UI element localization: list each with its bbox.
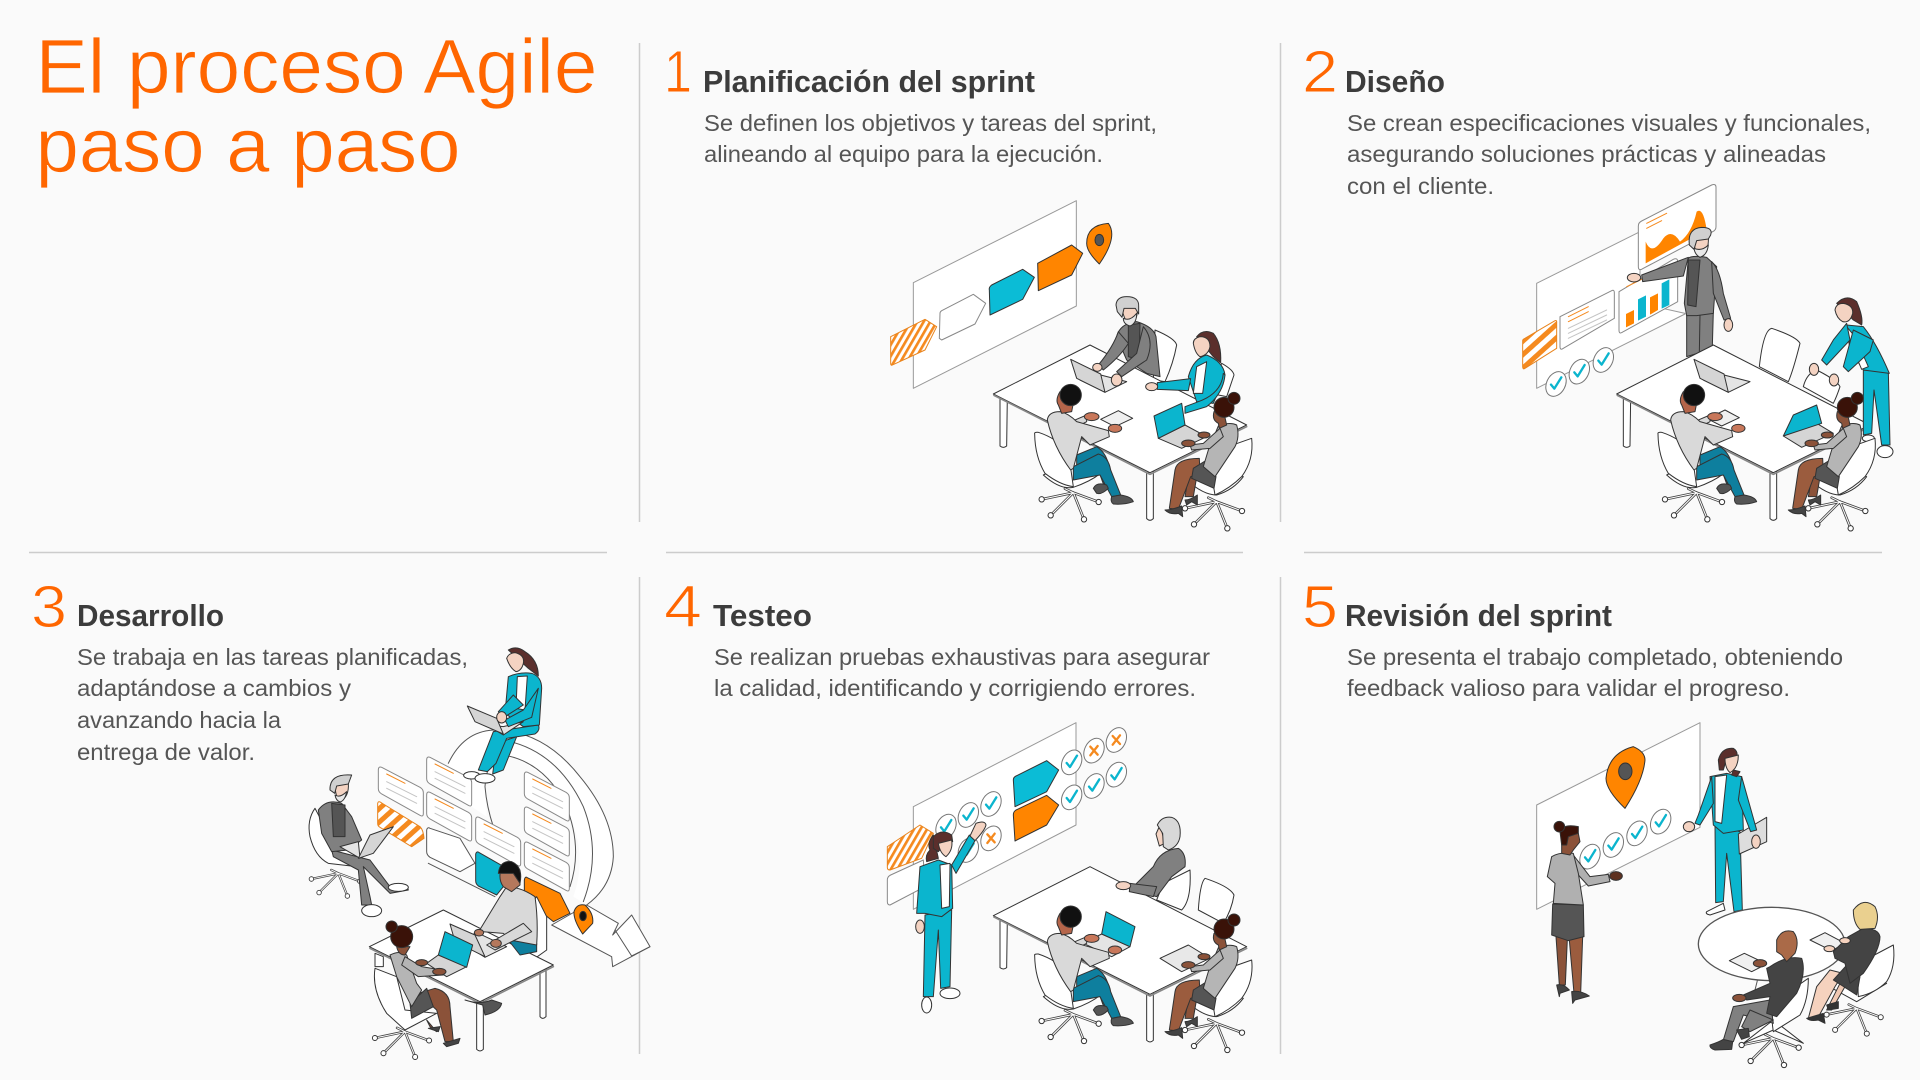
tablet <box>1160 945 1210 972</box>
title heading: paso a paso <box>36 103 460 189</box>
laptop teal, held <box>1783 405 1833 447</box>
meeting table <box>993 345 1247 520</box>
body text step 4 <box>714 644 1210 701</box>
illustration: testing session <box>887 723 1252 1053</box>
person: grey-haired man seen from behind <box>1130 817 1234 923</box>
empty chairs <box>1759 328 1800 382</box>
man hands and arm <box>1093 327 1150 386</box>
panel: step 2 diseño <box>1302 39 1893 531</box>
number 2: 2 <box>1302 39 1338 105</box>
heading step 4: Testeo <box>713 598 812 633</box>
panel: step 4 testeo <box>664 574 1252 1053</box>
person: standing man presenting <box>1627 227 1733 357</box>
heading step 2: Diseño <box>1345 64 1445 99</box>
board <box>1537 723 1700 909</box>
illustration: sprint loop and team <box>309 648 650 1060</box>
illustration: design session <box>1523 185 1893 531</box>
meeting table <box>993 867 1247 1042</box>
body text step 2: asegurando soluciones prácticas y alineadas <box>1347 141 1826 167</box>
illustration: sprint planning meeting <box>891 201 1252 531</box>
panel: step 5 revisión <box>1302 574 1894 1068</box>
body text step 5 <box>1347 644 1843 701</box>
person: woman on the loop with laptop <box>464 648 542 783</box>
person: woman seen from behind <box>1788 392 1875 531</box>
body text step 4: Se realizan pruebas exhaustivas para asegurar <box>714 644 1210 670</box>
body text step 1 <box>704 110 1157 167</box>
body text step 3: entrega de valor. <box>77 739 255 765</box>
heading step 3: Desarrollo <box>77 598 224 633</box>
area chart card <box>1638 185 1716 270</box>
body text step 2: Se crean especificaciones visuales y funcionales, <box>1347 110 1871 136</box>
tablet <box>1707 410 1739 426</box>
desk <box>369 910 553 1051</box>
icon: location pin <box>1087 223 1112 264</box>
body text step 3: adaptándose a cambios y <box>77 675 352 701</box>
panel: step 3 desarrollo <box>31 574 650 1060</box>
panel: title <box>36 24 598 189</box>
check marks on the board <box>932 724 1131 866</box>
laptop on desk, teal <box>427 932 473 977</box>
person: woman seen from behind <box>1165 914 1252 1053</box>
check marks <box>1576 806 1675 872</box>
number 4: 4 <box>664 574 702 640</box>
icon: location pin <box>574 905 593 934</box>
person: teal woman chair <box>1210 363 1234 397</box>
body text step 5: feedback valioso para validar el progreso. <box>1347 675 1790 701</box>
body text step 3: Se trabaja en las tareas planificadas, <box>77 644 468 670</box>
body text step 3: avanzando hacia la <box>77 707 281 733</box>
person: grey-haired man chair <box>1153 330 1177 382</box>
round table <box>1698 907 1845 997</box>
body text step 1: Se definen los objetivos y tareas del sprint, <box>704 110 1157 136</box>
board with roadmap tags <box>891 201 1083 388</box>
man's arm on table <box>1116 882 1157 897</box>
heading step 1: Planificación del sprint <box>703 64 1035 99</box>
person: grey-haired man <box>1098 297 1160 377</box>
person: man seen from behind <box>1035 906 1133 1044</box>
laptop on desk, grey <box>450 923 532 957</box>
laptop teal <box>1083 912 1135 957</box>
laptop grey <box>1694 359 1750 392</box>
number 3: 3 <box>31 574 67 640</box>
panel: step 1 planificación <box>664 39 1252 531</box>
person: bald man seated <box>1710 931 1808 1068</box>
board with cards <box>1523 232 1685 388</box>
meeting table <box>1617 345 1870 520</box>
body text step 1: alineando al equipo para la ejecución. <box>704 141 1103 167</box>
laptop teal <box>1154 403 1207 448</box>
sprint loop arrow <box>428 730 650 967</box>
person: blonde woman seated <box>1807 902 1894 1036</box>
person: seated man with laptop <box>309 775 408 917</box>
illustration: sprint review <box>1537 723 1894 1068</box>
person: man at desk chair <box>520 897 547 967</box>
board with tags and checks <box>887 723 1076 909</box>
person: woman in teal pointing <box>916 822 986 1013</box>
person: man in grey sweater at desk <box>477 861 537 955</box>
tags on the loop <box>378 802 570 922</box>
person: woman in teal leaning on chair <box>1803 298 1893 458</box>
person: man seen from behind <box>1658 384 1757 522</box>
card stack <box>378 757 569 891</box>
number 5: 5 <box>1302 574 1338 640</box>
person: woman presenting in grey <box>1547 821 1622 1003</box>
body text step 2 <box>1347 110 1871 199</box>
body text step 2: con el cliente. <box>1347 173 1494 199</box>
laptop grey <box>1071 359 1127 392</box>
person: woman in teal <box>1146 331 1225 413</box>
card text lines <box>387 764 563 878</box>
heading step 5: Revisión del sprint <box>1345 598 1612 633</box>
body text step 3 <box>77 644 468 765</box>
body text step 5: Se presenta el trabajo completado, obteniendo <box>1347 644 1843 670</box>
title heading <box>36 24 598 189</box>
tablets <box>1729 933 1845 972</box>
tablet <box>1101 411 1133 427</box>
person: woman seen from behind <box>1165 392 1252 531</box>
check marks <box>1542 344 1618 400</box>
icon: location pin <box>1606 747 1645 808</box>
number 1: 1 <box>664 39 692 105</box>
body text step 4: la calidad, identificando y corrigiendo errores. <box>714 675 1196 701</box>
person: man seen from behind <box>1035 384 1133 522</box>
title heading: El proceso Agile <box>36 24 598 110</box>
person: woman in teal with folder <box>1683 748 1767 915</box>
person: woman seen from behind at desk <box>372 921 460 1060</box>
